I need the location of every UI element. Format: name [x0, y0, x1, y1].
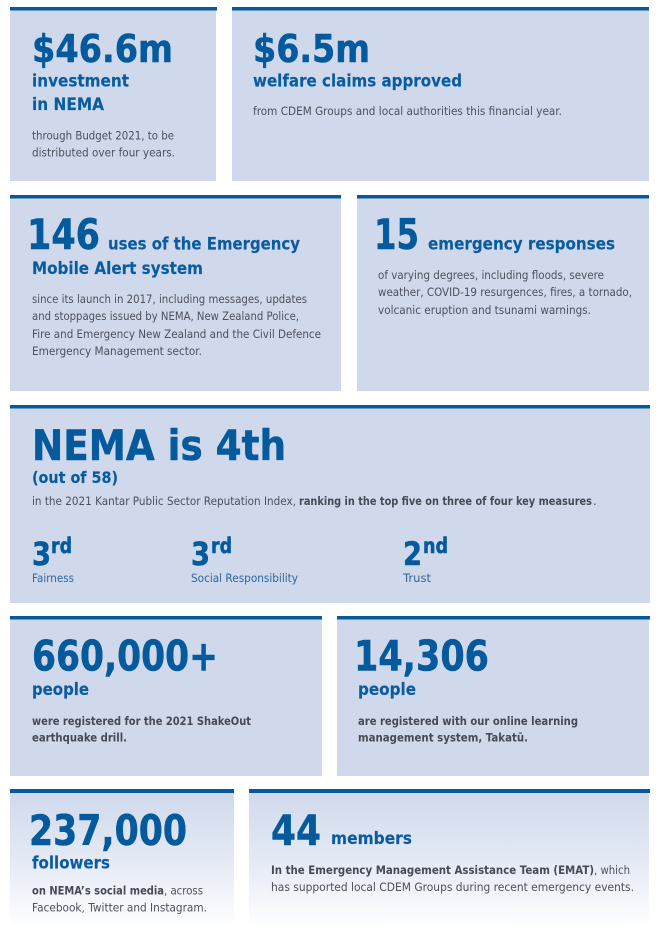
rank: Social Responsibility 3rd: [191, 534, 298, 585]
text block: launch details: Emergency Management sector.: [32, 344, 202, 358]
stat: 146: 146: [27, 210, 100, 259]
panel: 146 Emergency Mobile Alert: [10, 195, 341, 391]
text block: EMAT: In the Emergency Management Assistance Team (EMAT): [271, 863, 594, 877]
panel: 44 members: [249, 789, 650, 927]
heading: welfare claims approved: welfare claims approved: [253, 72, 462, 92]
panel: $46.6m investment: [10, 7, 217, 181]
text block: varying degrees: volcanic eruption and tsunami warnings.: [378, 303, 591, 317]
text block: launch details: Fire and Emergency New Zealand and the Civil Defence: [32, 327, 321, 341]
panel: NEMA is 4th: [10, 405, 650, 603]
text block: social media: on NEMA’s social media: [32, 884, 164, 898]
heading: followers: followers: [32, 854, 110, 874]
text block: varying degrees: [378, 268, 632, 317]
heading: investment in NEMA: [32, 72, 129, 115]
rank: Fairness 3rd: Fairness: [32, 571, 74, 585]
text block: Takatū: management system, Takatū.: [358, 730, 528, 744]
rank: Fairness 3rd: rd: [51, 534, 72, 558]
text block: Budget 2021: distributed over four years.: [32, 146, 175, 160]
stat: 44: 44: [271, 806, 321, 855]
rank: Trust 2nd: 2: [403, 535, 422, 573]
text block: social media: [32, 884, 207, 914]
rank: Fairness 3rd: 3: [32, 535, 51, 573]
text block: ShakeOut: earthquake drill.: [32, 730, 127, 744]
text block: social media: Facebook, Twitter and Instagram.: [32, 900, 207, 914]
subheading: out of 58: (out of 58): [32, 468, 118, 487]
panel: 14,306 people: [337, 616, 650, 776]
rank: Trust 2nd: [402, 534, 448, 585]
text block: Kantar index: .: [593, 494, 597, 508]
text block: Budget 2021: [32, 128, 175, 160]
rank: Trust 2nd: Trust: [402, 571, 431, 585]
text block: EMAT: [271, 863, 634, 894]
heading: investment in NEMA: investment: [32, 72, 129, 92]
text block: Takatū: are registered with our online learning: [358, 714, 578, 728]
rank: Social Responsibility 3rd: 3: [191, 535, 210, 573]
text block: Takatū: [358, 714, 578, 744]
text block: EMAT: has supported local CDEM Groups during recent emergency events.: [271, 880, 634, 894]
text block: varying degrees: of varying degrees, including floods, severe: [378, 268, 604, 282]
text block: launch details: and stoppages issued by NEMA, New Zealand Police,: [32, 309, 299, 323]
heading: emergency responses: emergency responses: [428, 234, 615, 254]
heading: people: people: [32, 680, 89, 700]
heading: people: people: [358, 680, 416, 700]
stat: $46.6m: $46.6m: [32, 27, 173, 71]
text block: ShakeOut: [32, 714, 251, 744]
heading: NEMA is 4th: NEMA is 4th: [32, 421, 286, 470]
text block: ShakeOut: were registered for the 2021 ShakeOut: [32, 714, 251, 728]
panel: 660,000+ people: [10, 616, 322, 776]
rank: Social Responsibility 3rd: Social Responsibility: [191, 571, 298, 585]
text block: launch details: [32, 292, 321, 358]
stat: 14,306: 14,306: [354, 632, 489, 680]
heading: uses of the Emergency Mobile Alert system: Mobile Alert system: [32, 259, 203, 279]
heading: uses of the Emergency Mobile Alert system: uses of the Emergency: [108, 234, 300, 254]
text block: Kantar index: in the 2021 Kantar Public Sector Reputation Index,: [32, 494, 296, 508]
stat: 660,000+: 660,000+: [32, 632, 218, 680]
text block: CDEM Groups: from CDEM Groups and local authorities this financial year.: [253, 104, 562, 118]
text block: Budget 2021: through Budget 2021, to be: [32, 128, 174, 142]
heading: investment in NEMA: in NEMA: [32, 95, 105, 115]
rank: Social Responsibility 3rd: rd: [211, 534, 232, 558]
stat: 15: 15: [374, 210, 419, 259]
panel: 237,000 followers: [10, 789, 234, 927]
heading: uses of the Emergency Mobile Alert system: [32, 234, 300, 279]
text block: Kantar index: ranking in the top five on three of four key measures: [299, 494, 592, 508]
stat: 237,000: 237,000: [29, 806, 187, 855]
heading: members: members: [331, 829, 412, 849]
panel: $6.5m welfare claims: [232, 7, 649, 181]
text block: social media: , across: [164, 884, 203, 898]
rank: Trust 2nd: nd: [423, 534, 448, 558]
text block: varying degrees: weather, COVID-19 resurgences, fires, a tornado,: [378, 285, 632, 299]
panel: 15 emergency responses: [357, 195, 649, 391]
rank: Fairness 3rd: [32, 534, 74, 585]
stat: $6.5m: $6.5m: [253, 27, 370, 71]
text block: launch details: since its launch in 2017, including messages, updates: [32, 292, 307, 306]
text block: EMAT: , which: [594, 863, 630, 877]
text block: Kantar index: [32, 494, 597, 508]
